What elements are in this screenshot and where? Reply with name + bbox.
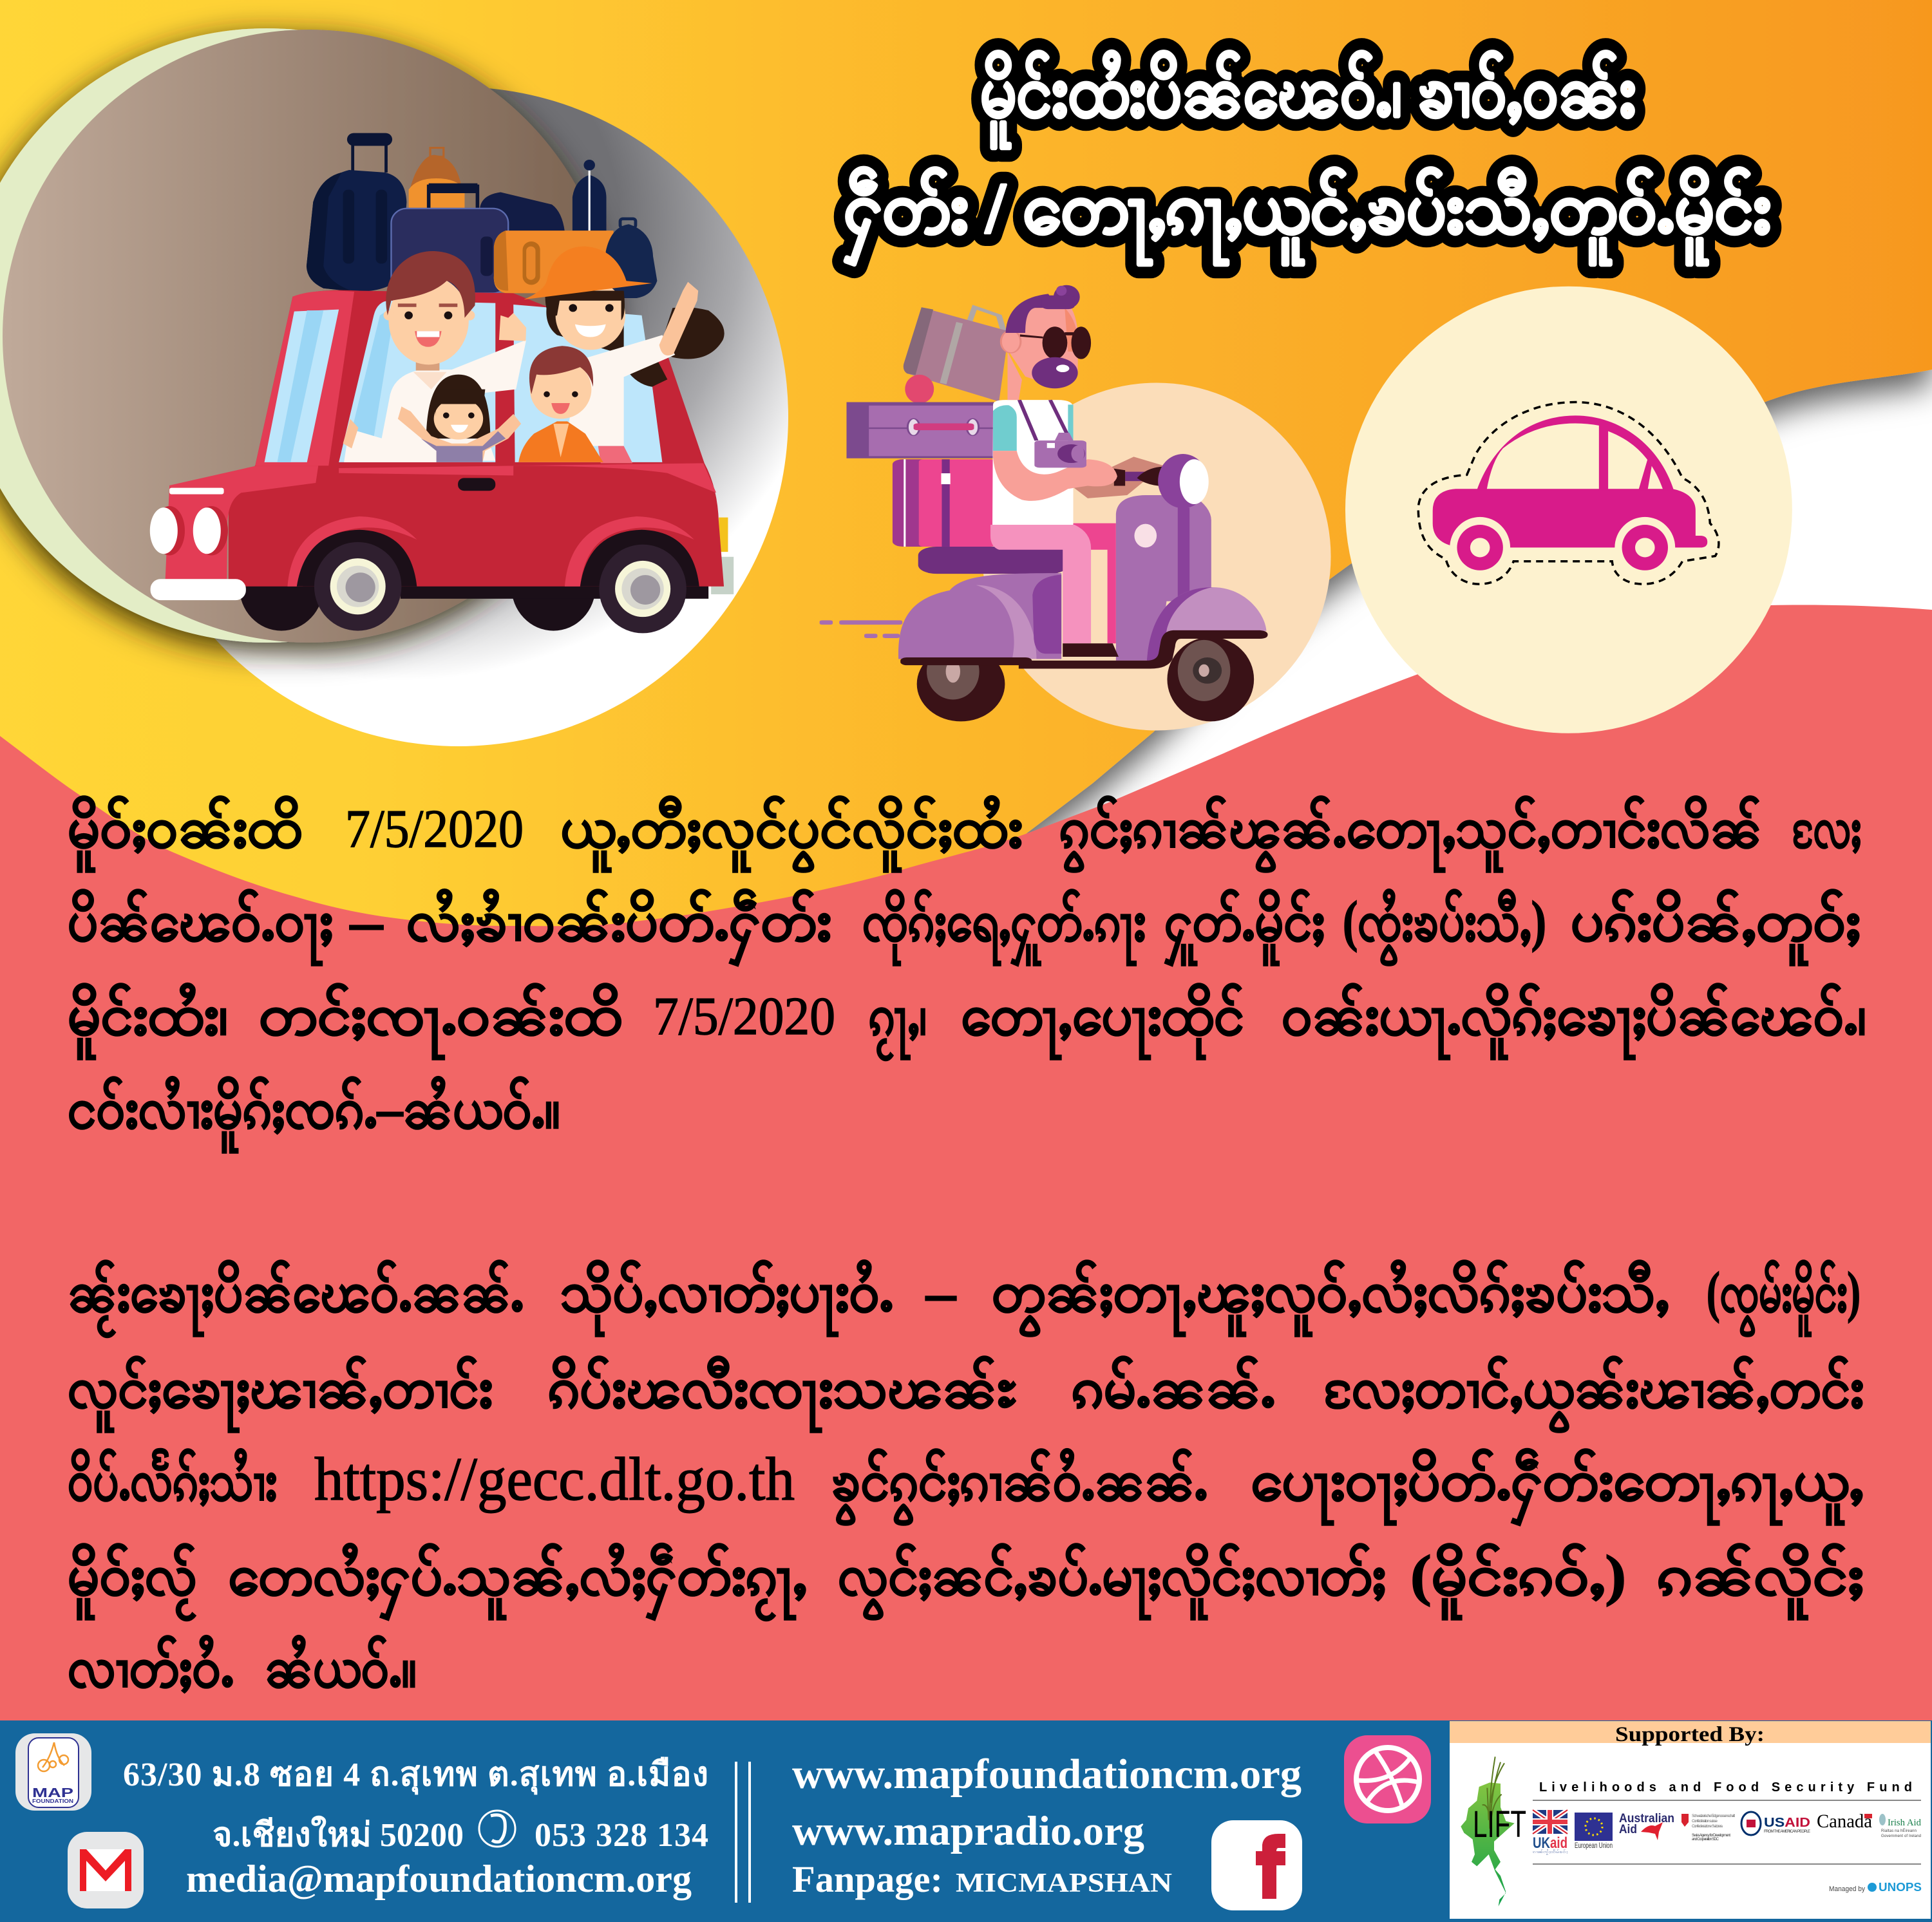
MAP Foundation logo [15,1733,91,1811]
text block: first paragraph: တေႃႇပေႃးထိုင် [961,982,1244,1060]
text block: first paragraph: ၸိုၵ်ႈရေႇႁူတ်ႉၵႃး [862,888,1146,966]
text block: first paragraph: လႄႈ [1792,797,1861,860]
luggage on scooter [846,307,1009,547]
web links: MICMAPSHAN [956,1869,1172,1898]
Swiss agency logo: and Cooperation SDC [1692,1838,1719,1842]
USAID logo: FROM THE AMERICAN PEOPLE [1764,1830,1810,1834]
panel: supporters: Supported By: [1615,1723,1765,1746]
text block: first paragraph: 7/5/2020 [345,799,524,859]
text block: second paragraph: (မိူင်းၵဝ်ႇ) [1410,1542,1626,1621]
text block: second paragraph: (ၸွမ်းမိူင်း) [1707,1259,1861,1337]
car body [166,290,734,631]
cream circle [1345,287,1792,733]
text block: second paragraph: လူင်ႈၶေႃႈၽၢၼ်ႇတၢင်း [68,1355,493,1433]
MAP Foundation logo: MAP [32,1786,73,1800]
text block: second paragraph: သိုပ်ႇလၢတ်ႈပႃးဝႆႉ [560,1259,893,1337]
icon: dribbble [1344,1735,1431,1823]
text block: second paragraph: ၵိပ်းၽလီးၸႃးသၽၼ်ႊ [548,1355,1016,1433]
web links: www.mapfoundationcm.org [792,1751,1302,1798]
LIFT logo with map [1461,1757,1526,1907]
Australian Aid logo: Australian [1619,1812,1674,1825]
contact address: 053 328 134 [535,1817,708,1854]
UNOPS managed by [1829,1881,1922,1894]
text block: first paragraph [68,795,1866,1154]
text block: second paragraph: – [926,1263,956,1323]
contact address: media@mapfoundationcm.org [186,1858,692,1900]
Swiss agency logo [1681,1814,1735,1842]
LIFT logo with map: LIFT [1473,1804,1526,1845]
UK aid logo: ၵၢၼ်ၸွႆႈထႅမ်ၶဝ်ႈ [1533,1849,1568,1855]
illustration: family in red car [0,28,788,746]
panel: supporters: Livelihoods and Food Security Fund [1539,1780,1912,1795]
footer band [0,1720,1932,1922]
Swiss agency logo: Schweizerische Eidgenossenschaft [1692,1814,1735,1818]
title: မိူင်းထႆးပိၼ်ၽေဝ်ႉ၊ ၶၢဝ်ႇဝၼ်း [980,51,1636,149]
illustration: man on purple scooter [820,285,1331,730]
USAID logo [1741,1812,1810,1835]
contact address: 63/30 ม.8 ซอย 4 ถ.สุเทพ ต.สุเทพ อ.เมือง [123,1757,708,1795]
background coral wave [0,605,1932,1922]
title: မိူင်းထႆးပိၼ်ၽေဝ်ႉ၊ ၶၢဝ်ႇဝၼ်း [980,51,1636,149]
Irish Aid logo: Irish Aid [1888,1818,1921,1828]
text block: first paragraph: ၵွင်ႈၵၢၼ်ၽွၼ်ႉတေႃႇသူင်ႇတၢင်းလိၼ် [1059,795,1762,873]
text block: first paragraph: ပၵ်းပိၼ်ႇတူဝ်ႈ [1571,888,1861,966]
illustration: pink car badge [1345,287,1792,733]
text block: first paragraph: ၵႂႃႇ၊ [869,985,927,1062]
text block: second paragraph: ၼႂ်းၶေႃႈပိၼ်ၽေဝ်ႉၼၼ်ႉ [68,1259,524,1339]
Irish Aid logo: Rialtas na hÉireann [1881,1829,1917,1833]
Australian Aid logo [1619,1812,1674,1840]
peach circle [983,382,1331,730]
text block: second paragraph: လၢတ်ႈဝႆႉ [68,1634,234,1699]
Swiss agency logo: Swiss Agency for Development [1692,1834,1730,1838]
Swiss agency logo: Confederazione Svizzera [1692,1825,1723,1829]
rider [990,285,1209,657]
text block: second paragraph [68,1259,1864,1699]
text block: first paragraph: ယူႇတီႈလူင်ပွင်လိူင်ႈထႆး [560,795,1023,873]
UNOPS managed by: Managed by [1829,1885,1865,1893]
text block: first paragraph: ပိၼ်ၽေဝ်ႉဝႃႈ [68,888,333,966]
title: ႁဵတ်း / တေႃႇၵႃႇယူင်ႇၶပ်းသီႇတူဝ်ႉမိူင်း [844,167,1771,266]
dashed sticker outline [1418,402,1719,584]
panel: supporters [1450,1721,1931,1919]
web links: Fanpage: [792,1858,943,1900]
web links [792,1751,1302,1900]
pale green and brown circles [0,28,616,643]
EU logo: European Union [1575,1841,1613,1850]
text block: first paragraph: မိူဝ်ႈဝၼ်းထိ [68,795,302,873]
contact address: จ.เชียงใหม่ 50200 [213,1815,464,1854]
MAP Foundation logo: FOUNDATION [32,1798,73,1804]
text block: second paragraph: ၼႆယဝ်ႉ။ [265,1634,417,1699]
background white swoosh [0,0,1932,966]
white circle backdrop [129,87,788,746]
icon: gmail [68,1832,144,1908]
text block: first paragraph: – [350,892,383,952]
icon: telephone [479,1811,515,1847]
text block: second paragraph: မိူဝ်ႈလႂ် [68,1542,197,1622]
scooter frame [898,495,1268,721]
text block: first paragraph: ဝၼ်းယႃႉလိူၵ်ႈၶေႃႈပိၼ်ၽေဝ်ႉ၊ [1282,982,1866,1060]
text block: second paragraph: ပေႃးဝႃႈပိတ်ႉႁဵတ်းတေႃႇၵႃႇယူႇ [1251,1447,1864,1526]
title: ႁဵတ်း / တေႃႇၵႃႇယူင်ႇၶပ်းသီႇတူဝ်ႉမိူင်း [844,167,1771,266]
UNOPS managed by: UNOPS [1879,1881,1922,1894]
contact address [123,1757,708,1900]
text block: second paragraph: လႄႈတၢင်ႇယွၼ်းၽၢၼ်ႇတင်း [1324,1355,1864,1433]
text block: first paragraph: မိူင်းထႆး၊ [68,982,228,1060]
Australian Aid logo: Aid [1619,1823,1637,1836]
text block: second paragraph: ၶွင်ၵွင်ႈၵၢၼ်ဝႆႉၼၼ်ႉ [831,1447,1208,1526]
text block: second paragraph: ၵမ်ႉၼၼ်ႉ [1072,1355,1275,1420]
text block: first paragraph: တင်ႈၸႃႉဝၼ်းထိ [259,982,622,1060]
text block: second paragraph: ဝိပ်ႉလႅၵ်ႈသၢႆး [68,1447,277,1512]
text block: second paragraph: တေလႆႈႁပ်ႉသူၼ်ႇလႆႈႁဵတ်းၵႂႃႇ [228,1542,807,1622]
text block: second paragraph: လွင်ႈၼင်ႇၶပ်ႉမႃႈလိူင်ႈလၢတ်ႈ [838,1542,1386,1621]
car wheels and lights [150,488,687,633]
text block: first paragraph: (ၸွႆးၶပ်းသီႇ) [1343,888,1546,966]
pink car icon [1433,415,1707,578]
Canada wordmark: Canada [1817,1811,1872,1832]
background yellow orange wave [0,0,1932,966]
text block: first paragraph: ငဝ်းလၢႆးမိူၵ်ႈၸၵ်ႉ–ၼႆယဝ်ႉ။ [68,1075,560,1154]
title [844,51,1771,266]
icon: facebook [1211,1820,1302,1910]
Swiss agency logo: Confédération suisse [1692,1820,1718,1823]
text block: second paragraph: ၵၼ်လိူင်ႈ [1657,1542,1864,1621]
car drawing [150,133,734,633]
text block: first paragraph: လႆႈၶၢႆဝၼ်းပိတ်ႉႁဵတ်း [406,888,831,966]
Irish Aid logo [1879,1814,1921,1838]
text block: first paragraph: ႁူတ်ႉမိူင်ႈ [1164,888,1325,966]
USAID logo: USAID [1764,1816,1810,1830]
luggage stack [307,133,657,298]
family passengers [343,247,724,463]
EU logo [1575,1813,1613,1850]
text block: second paragraph: တွၼ်ႈတႃႇၽူႈလူဝ်ႇလႆႈလိၵ်ႈၶပ်းသီႇ [992,1259,1669,1337]
text block: second paragraph: https://gecc.dlt.go.th [314,1445,795,1513]
web links: www.mapradio.org [792,1808,1144,1854]
speed lines [820,620,902,638]
text block: first paragraph: 7/5/2020 [653,986,835,1046]
UK aid logo [1533,1810,1568,1855]
UK aid logo: UKaid [1533,1834,1567,1852]
Irish Aid logo: Government of Ireland [1881,1834,1921,1838]
